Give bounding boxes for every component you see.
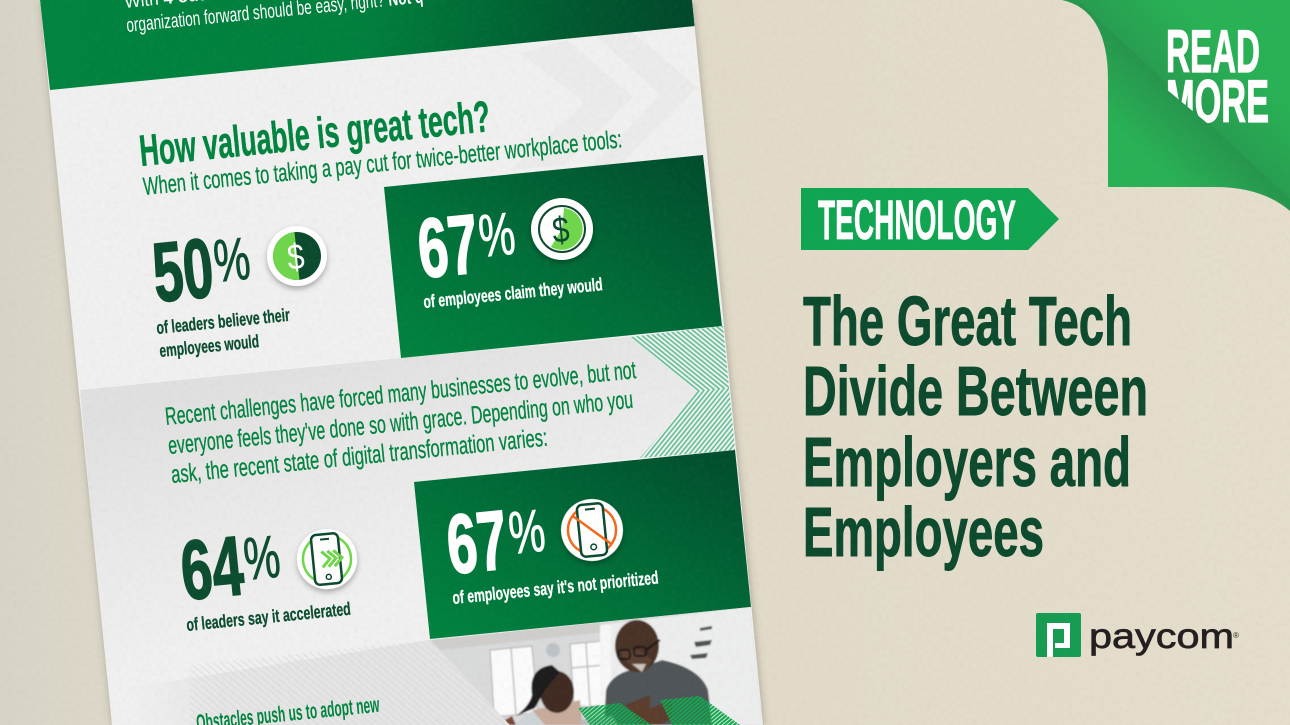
icon: phone accelerating [294, 526, 360, 592]
wordmark: paycom [1089, 617, 1234, 656]
number 50%: % [211, 225, 253, 295]
panel: leaders stat 50% [148, 220, 327, 361]
panel: employees stat 67% not prioritized [414, 450, 751, 639]
registered mark: ® [1233, 631, 1239, 640]
read more label [1168, 30, 1268, 124]
person: woman [497, 665, 618, 725]
top green band [40, 0, 695, 90]
icon: two-thirds dollar coin: $ [550, 208, 571, 251]
number 64%: 64 [176, 518, 248, 618]
panel: leaders stat 64% [176, 518, 360, 635]
infographic sheet [40, 0, 770, 725]
icon: phone prohibited [558, 496, 626, 564]
category tag: technology [801, 188, 1059, 251]
paycom logo [1036, 613, 1239, 657]
caption: of leaders believe their [155, 305, 291, 338]
icon: half dollar coin [267, 226, 327, 286]
text block: digital transformation: Recent challenges have forced many businesses to evolve, but not [164, 356, 637, 431]
caption: of leaders say it accelerated [185, 599, 352, 635]
number 67%: 67 [442, 492, 511, 592]
text block: digital transformation: ask, the recent state of digital transformation varies: [170, 424, 549, 489]
green corner shape [1062, 0, 1290, 211]
white chevron hatch [630, 326, 735, 458]
title [803, 282, 1148, 571]
number 64%: % [241, 523, 283, 593]
photo: two colleagues talking [430, 600, 770, 725]
number 67%: 67 [413, 196, 482, 296]
number 67%: % [476, 200, 518, 270]
page curl: green corner [1062, 0, 1290, 211]
text block: digital transformation: everyone feels they've done so with grace. Depending on who you [167, 386, 634, 460]
category tag: technology: TECHNOLOGY [818, 188, 1016, 251]
heading: how valuable is great tech: How valuable is great tech? [137, 92, 492, 176]
number 50%: 50 [148, 220, 217, 320]
faint chevron pattern top [510, 30, 697, 170]
logo mark [1036, 613, 1081, 657]
grey section background [80, 337, 697, 670]
icon: half dollar coin: $ [285, 235, 306, 278]
panel: employees stat 67% pay cut [384, 155, 722, 358]
sheet paper [40, 0, 763, 725]
green box [414, 450, 751, 639]
subheading: When it comes to taking a pay cut for twice-better workplace tools: [142, 125, 623, 201]
title: Employers and [803, 423, 1131, 501]
title: Employees [803, 493, 1044, 571]
caption [155, 305, 291, 361]
person: man [604, 620, 712, 725]
intro text on band [123, 0, 424, 37]
number 67%: % [506, 497, 548, 567]
caption: of employees say it's not prioritized [451, 568, 659, 608]
icon: two-thirds dollar coin [531, 198, 593, 260]
text block: digital transformation [164, 356, 637, 489]
green box [384, 155, 722, 358]
hatched grey panel bottom [190, 640, 510, 725]
green hatch overlay [578, 703, 652, 725]
caption: of employees claim they would [422, 274, 604, 312]
caption: employees would [158, 331, 260, 361]
